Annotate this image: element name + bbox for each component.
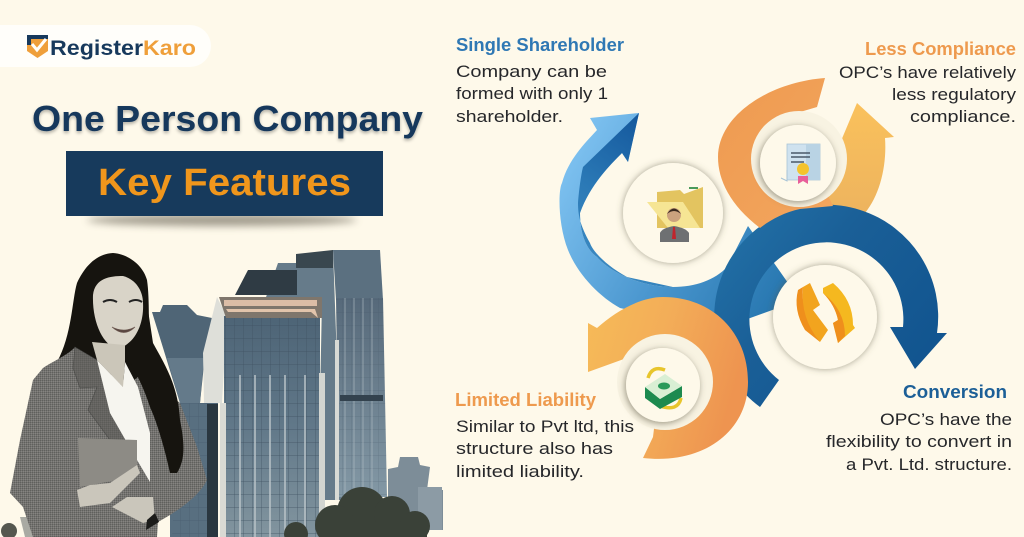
trees: [284, 487, 430, 537]
orange bottom arrow: [588, 297, 748, 459]
banner shadow: [87, 214, 357, 226]
dark blue arrow: [714, 205, 947, 407]
text block: single shareholder: Company can be: [456, 62, 607, 81]
tablet: [78, 438, 137, 487]
icon: folder with person: [647, 187, 703, 242]
right tower: [296, 250, 387, 500]
hair behind shoulders: [57, 253, 150, 385]
text block: less compliance: [839, 39, 1017, 126]
icon circle: less compliance: [751, 111, 847, 207]
text block: conversion: OPC’s have the: [880, 410, 1012, 429]
hair lock over shoulder: [125, 310, 183, 473]
logo wordmark: Register Karo: [50, 37, 196, 60]
front tower: [203, 297, 325, 537]
eyes and mouth: [103, 300, 142, 332]
text block: limited liability: Limited Liability: [455, 390, 596, 410]
logo pill: [0, 25, 211, 67]
title: One Person Company: [32, 98, 423, 139]
blue arrow inner band: [578, 113, 673, 287]
text block: conversion: flexibility to convert in: [826, 432, 1012, 451]
small distant buildings: [388, 457, 443, 530]
icon circle: conversion: [773, 265, 877, 369]
text block: conversion: a Pvt. Ltd. structure.: [846, 455, 1012, 474]
text block: conversion: Conversion: [903, 382, 1007, 402]
text block: less compliance: Less Compliance: [865, 39, 1016, 59]
left tower: [152, 305, 218, 537]
text block: limited liability: structure also has: [456, 439, 613, 458]
text block: limited liability: limited liability.: [456, 462, 584, 481]
cycle diagram: [560, 78, 947, 459]
icon circle: limited liability: [617, 334, 713, 430]
logo: [0, 25, 211, 67]
banner: key features: [66, 151, 383, 216]
banner: key features: Key Features: [98, 162, 351, 204]
cuff: [146, 513, 159, 530]
face: [93, 276, 143, 349]
icon: certificate: [781, 144, 820, 184]
hands: [77, 465, 155, 523]
lapel: [73, 347, 127, 440]
text block: limited liability: Similar to Pvt ltd, this: [456, 417, 634, 436]
text block: single shareholder: [456, 35, 624, 126]
yellow arrow top right: [800, 103, 894, 225]
text block: less compliance: compliance.: [910, 107, 1016, 126]
dark rooftop: [235, 270, 297, 295]
text block: less compliance: OPC’s have relatively: [839, 63, 1017, 82]
icon: rotating arrows: [797, 283, 855, 343]
middle tower: [265, 250, 342, 500]
neck: [92, 342, 125, 387]
distant structure bottom left: [1, 517, 48, 537]
text block: less compliance: less regulatory: [892, 85, 1017, 104]
text block: single shareholder: shareholder.: [456, 107, 563, 126]
person: [10, 253, 207, 537]
text block: single shareholder: Single Shareholder: [456, 35, 624, 55]
icon: money stack: [645, 369, 682, 409]
text block: limited liability: [455, 390, 634, 481]
blue arrow: [560, 113, 800, 330]
blazer: [10, 347, 207, 537]
text block: conversion: [826, 382, 1012, 474]
buildings photo: [1, 250, 443, 537]
orange arc top: [718, 78, 833, 228]
icon circle: single shareholder: [623, 163, 723, 263]
shirt: [97, 360, 150, 482]
logo shield icon: [27, 35, 48, 58]
text block: single shareholder: formed with only 1: [456, 84, 608, 103]
